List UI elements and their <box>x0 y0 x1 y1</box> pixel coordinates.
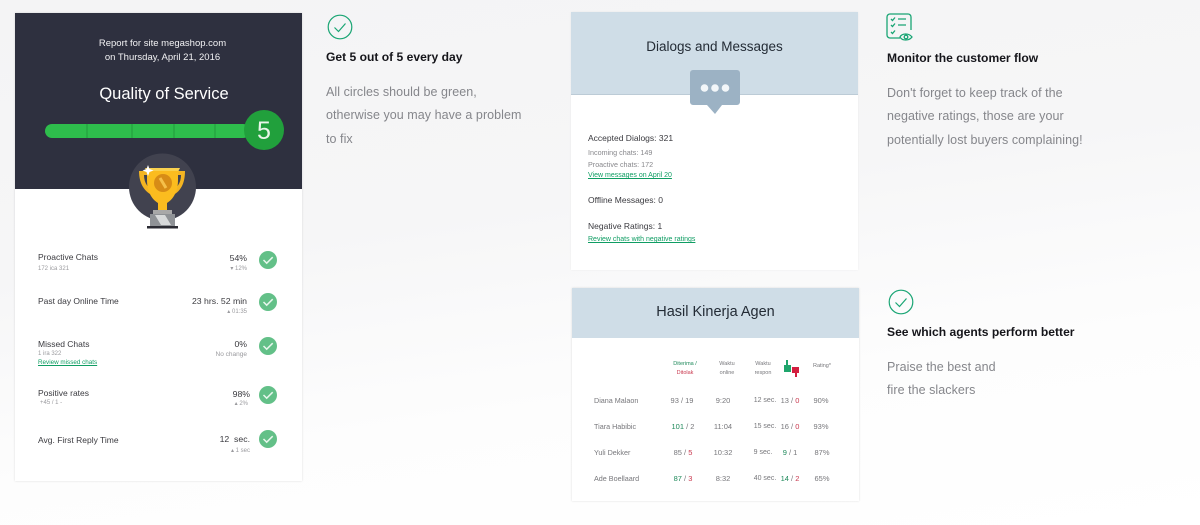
metric: average first reply time: 12 sec. <box>220 434 250 444</box>
table row: Diana Malaon <box>594 396 828 405</box>
text: negative ratings: Negative Ratings: 1 <box>588 221 662 231</box>
table row: Ade Boellaard: 40 sec. <box>754 475 776 482</box>
report subtitle <box>99 38 226 63</box>
metric: average first reply time: Avg. First Reply Time <box>38 435 119 445</box>
text: circles advice <box>326 85 521 146</box>
table row: Tiara Habibic: 11:04 <box>714 422 732 431</box>
metric: missed chats: Missed Chats <box>38 339 90 349</box>
heading: get 5 out of 5: Get 5 out of 5 every day <box>326 50 462 64</box>
text: monitor advice: potentially lost buyers complaining! <box>887 133 1083 147</box>
table row: Tiara Habibic <box>594 422 828 431</box>
table row: Yuli Dekker <box>594 448 830 457</box>
table row: Diana Malaon: 90% <box>813 396 828 405</box>
table column headers: Rating* <box>813 363 831 369</box>
metric: positive rates: Positive rates <box>38 388 89 398</box>
metric: proactive chats: Proactive Chats <box>38 252 98 262</box>
text: monitor advice <box>887 86 1083 147</box>
text: circles advice: otherwise you may have a problem <box>326 108 521 122</box>
metric: proactive chats: ▾ 12% <box>230 266 247 272</box>
icon: check circle <box>328 14 352 40</box>
table row: Yuli Dekker: 85 / 5 <box>674 448 692 457</box>
icon: checklist with eye <box>886 13 913 41</box>
heading: dialogs and messages: Dialogs and Messages <box>646 39 783 54</box>
table row: Ade Boellaard: 8:32 <box>716 474 730 483</box>
table row: Diana Malaon: 9:20 <box>716 396 730 405</box>
table row: Tiara Habibic: 15 sec. <box>754 423 776 430</box>
link: review negative ratings: Review chats with negative ratings <box>588 236 695 243</box>
metric: average first reply time <box>38 430 277 454</box>
dark header <box>15 13 302 189</box>
table column headers: respon <box>755 370 771 376</box>
metric: missed chats <box>38 337 277 366</box>
text: incoming chats: Incoming chats: 149 <box>588 148 652 157</box>
table column headers: Waktu <box>755 361 771 367</box>
table row: Diana Malaon: Diana Malaon <box>594 396 638 405</box>
table row: Diana Malaon: 13 / 0 <box>781 396 799 405</box>
text: praise advice <box>887 360 996 397</box>
metric: past day online time: ▴ 01:35 <box>227 309 247 315</box>
table row: Tiara Habibic: 101 / 2 <box>672 422 694 431</box>
link: view messages: View messages on April 20 <box>588 172 672 179</box>
text: monitor advice: negative ratings, those are your <box>887 109 1064 123</box>
table column headers <box>673 360 831 377</box>
text: praise advice: fire the slackers <box>887 383 975 397</box>
table row: Ade Boellaard <box>594 474 830 483</box>
metric: positive rates <box>38 386 277 407</box>
metric: past day online time: 23 hrs. 52 min <box>192 296 247 306</box>
table column headers: online <box>720 370 734 376</box>
panel: quality of service report <box>15 13 302 481</box>
metric: past day online time: Past day Online Time <box>38 296 119 306</box>
heading: quality of service: Quality of Service <box>99 85 229 103</box>
table row: Tiara Habibic: Tiara Habibic <box>594 422 636 431</box>
text: accepted dialogs: Accepted Dialogs: 321 <box>588 133 673 143</box>
table column headers: Ditolak <box>677 370 693 376</box>
metric: positive rates: ▴ 2% <box>235 401 248 407</box>
table row: Tiara Habibic: 93% <box>813 422 828 431</box>
score bar <box>45 110 284 150</box>
metric: average first reply time: ▴ 1 sec <box>231 448 250 454</box>
icon: check circle agents <box>888 290 914 314</box>
heading: hasil kinerja agen: Hasil Kinerja Agen <box>656 304 775 320</box>
table row: Ade Boellaard: 14 / 2 <box>781 474 799 483</box>
metric: past day online time <box>38 293 277 315</box>
report subtitle: Report for site megashop.com <box>99 38 226 49</box>
report subtitle: on Thursday, April 21, 2016 <box>105 52 220 63</box>
table row: Yuli Dekker: Yuli Dekker <box>594 448 630 457</box>
table row: Diana Malaon: 93 / 19 <box>671 396 693 405</box>
table row: Diana Malaon: 12 sec. <box>754 397 776 404</box>
table row: Ade Boellaard: 87 / 3 <box>674 474 692 483</box>
panel header <box>572 288 859 338</box>
table row: Ade Boellaard: 65% <box>814 474 830 483</box>
metric: proactive chats: 172 ica 321 <box>38 266 69 272</box>
heading: see which agents perform better: See which agents perform better <box>887 325 1075 339</box>
metric: missed chats: 0% <box>234 339 247 349</box>
panel: agent performance <box>572 288 859 501</box>
metric: positive rates: 98% <box>233 389 250 399</box>
heading: monitor the customer flow: Monitor the customer flow <box>887 51 1038 65</box>
text: monitor advice: Don't forget to keep track of the <box>887 86 1063 100</box>
metric: missed chats: No change <box>216 351 247 358</box>
score bar: 5 <box>257 117 271 145</box>
table row: Tiara Habibic: 16 / 0 <box>781 422 799 431</box>
panel header <box>571 12 858 95</box>
text: offline messages: Offline Messages: 0 <box>588 195 663 205</box>
text: circles advice: All circles should be green, <box>326 85 477 99</box>
icon: chat bubble <box>690 70 740 114</box>
text: circles advice: to fix <box>326 132 353 146</box>
table row: Ade Boellaard: Ade Boellaard <box>594 474 639 483</box>
metric: proactive chats <box>38 251 277 272</box>
metric: missed chats: 1 ira 322 <box>38 351 61 357</box>
table row: Yuli Dekker: 87% <box>814 448 830 457</box>
table row: Yuli Dekker: 9 / 1 <box>783 448 797 457</box>
link: review missed chats: Review missed chats <box>38 359 97 366</box>
panel: dialogs and messages <box>571 12 858 270</box>
table column headers: Diterima / <box>673 361 697 367</box>
metric: proactive chats: 54% <box>230 253 247 263</box>
metric: positive rates: +45 / 1 - <box>40 400 62 406</box>
text: proactive chats: Proactive chats: 172 <box>588 160 653 169</box>
table row: Yuli Dekker: 10:32 <box>714 448 732 457</box>
table row: Yuli Dekker: 9 sec. <box>754 449 772 456</box>
text: praise advice: Praise the best and <box>887 360 996 374</box>
table column headers: Waktu <box>719 361 735 367</box>
icon: trophy <box>129 154 196 228</box>
